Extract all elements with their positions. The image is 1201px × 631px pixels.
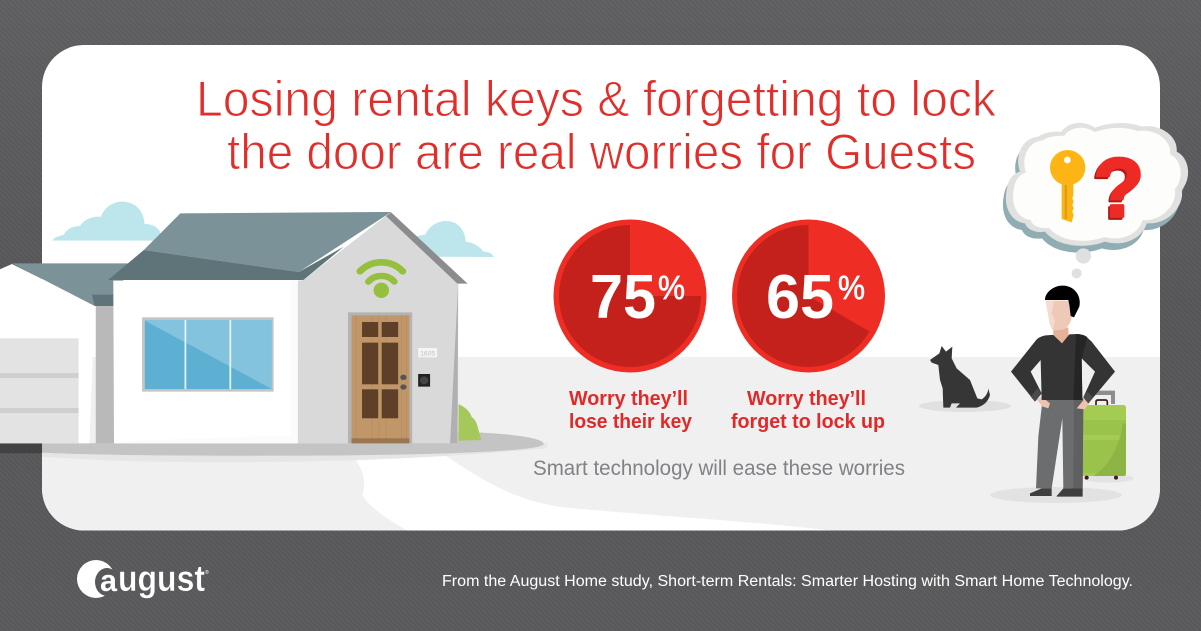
thought bubble: [1003, 123, 1188, 278]
suitcase: [1080, 391, 1133, 483]
house number: [418, 348, 437, 357]
caption: Smart technology will ease these worries: [533, 457, 905, 480]
icon: key: [1050, 150, 1085, 222]
logo: august: ®: [205, 569, 209, 576]
house number: 1605: [420, 350, 435, 357]
footer source text: From the August Home study, Short-term Rentals: Smarter Hosting with Smart Home Technology.: [442, 573, 1133, 590]
icon: question mark: ?: [1092, 143, 1143, 236]
main roof: [108, 212, 391, 280]
label: lose their key: lose their key: [569, 411, 693, 433]
trousers and shoes: [1030, 397, 1090, 497]
chart: 75 percent pie: 75: [590, 263, 656, 332]
label: forget to lock up: forget to lock up: [731, 411, 885, 433]
logo: august: ugust: [118, 558, 205, 599]
bush: [458, 404, 481, 441]
white wall: [113, 281, 298, 443]
gable wall: [298, 216, 458, 443]
person upper body: [1011, 286, 1115, 403]
label: lose their key: [569, 388, 693, 433]
title: [196, 71, 997, 180]
logo: august: [77, 558, 209, 599]
logo: august: a: [100, 563, 118, 598]
dog: [919, 346, 1011, 412]
window: [142, 317, 274, 392]
thought dots: [1072, 248, 1091, 278]
garage: [0, 263, 130, 443]
smart lock: [418, 374, 430, 387]
icon: question mark: ?: [1093, 142, 1144, 235]
chart: 65 percent pie: [732, 220, 885, 372]
illustration: house: [0, 202, 547, 462]
icon: wifi: [360, 262, 403, 298]
title: the door are real worries for Guests: [227, 124, 976, 180]
panel: white card: [42, 45, 1160, 532]
chart: 65 percent pie: 65: [766, 263, 834, 332]
ground shadow: [0, 432, 547, 462]
icon: right cloud: [414, 221, 494, 257]
chart: 75 percent pie: [554, 220, 706, 372]
chart: 65 percent pie: %: [838, 269, 865, 306]
label: forget to lock up: Worry they’ll: [747, 388, 866, 410]
label: lose their key: Worry they’ll: [569, 388, 688, 410]
icon: left cloud: [53, 202, 160, 241]
chart: 75 percent pie: %: [658, 269, 685, 306]
label: forget to lock up: [731, 388, 885, 433]
guest shadow: [990, 487, 1122, 503]
title: Losing rental keys & forgetting to lock: [196, 71, 997, 127]
door: [348, 312, 412, 443]
